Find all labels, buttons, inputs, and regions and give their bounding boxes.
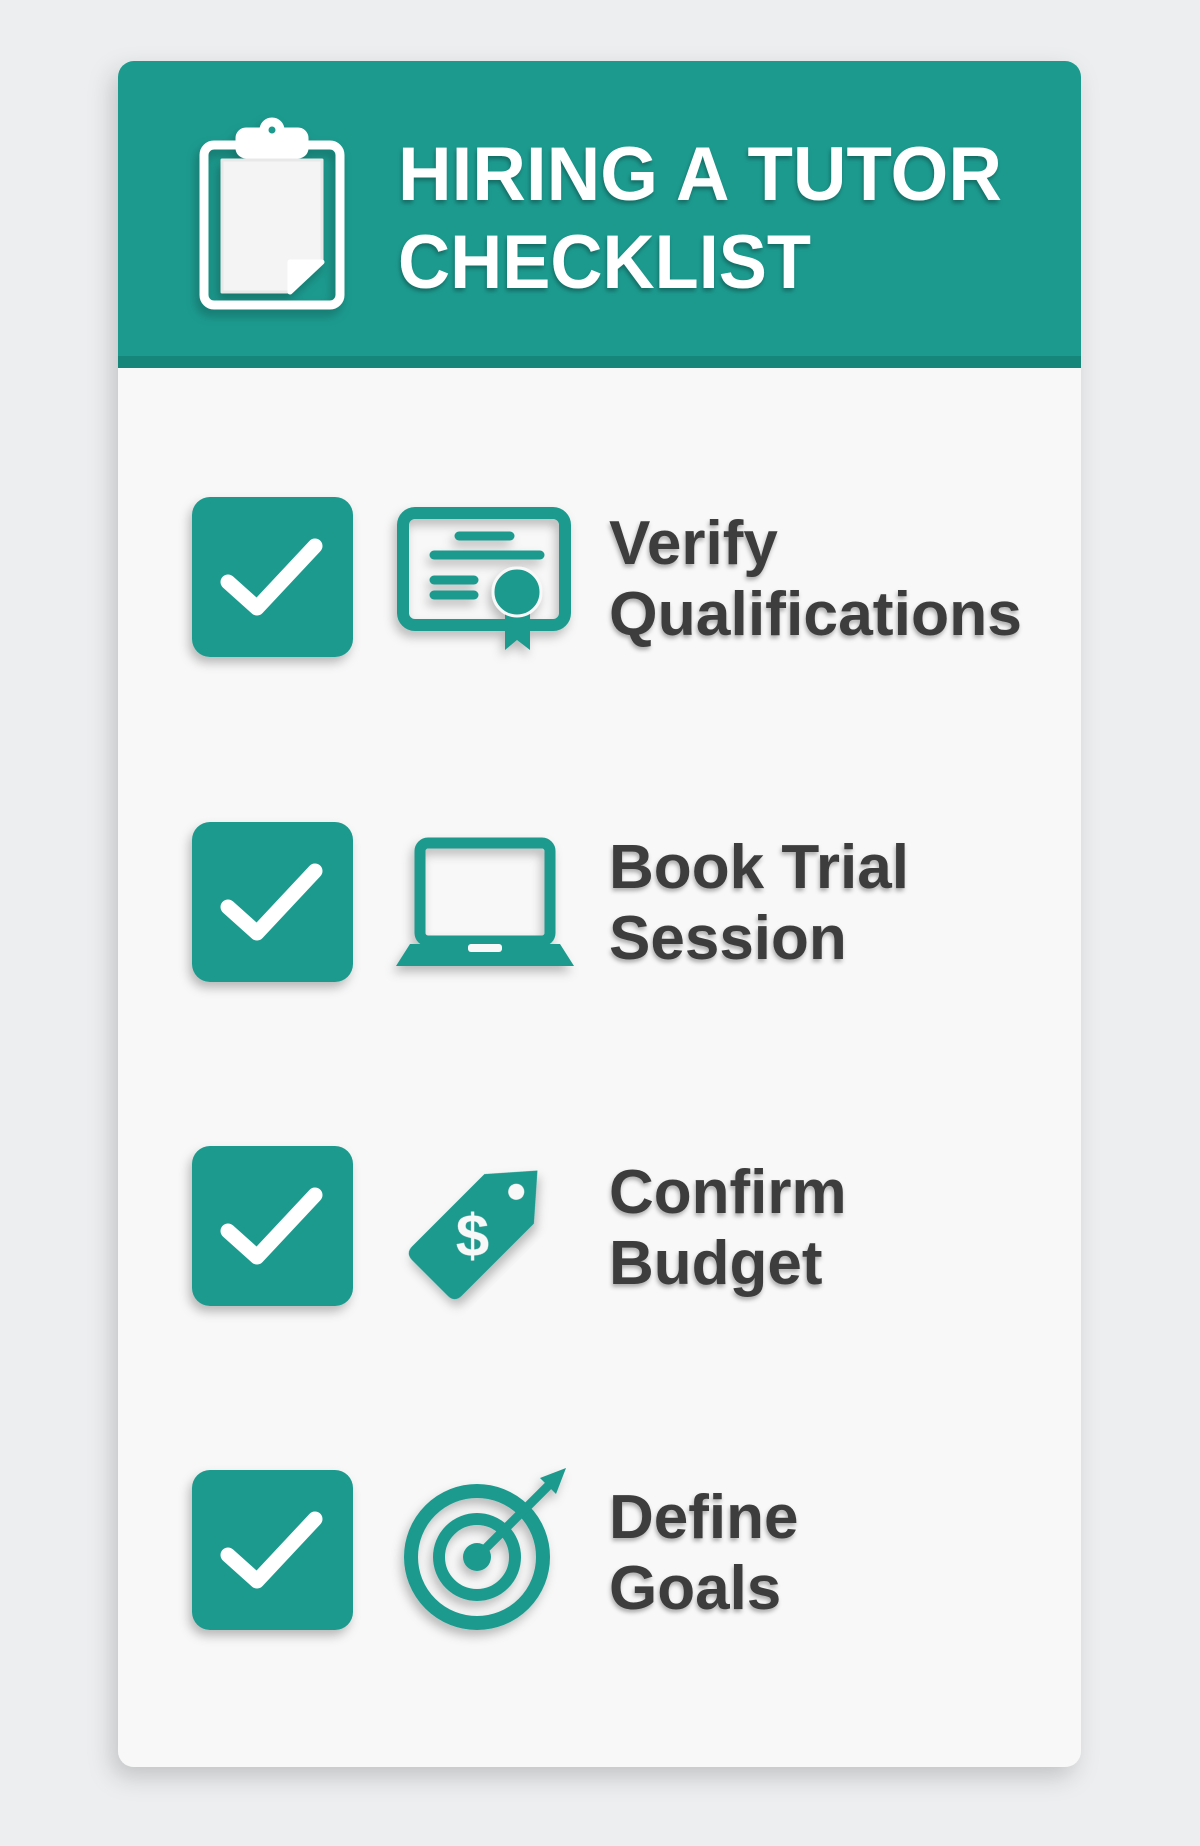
checklist item 3 bbox=[192, 1145, 847, 1306]
label 3: Confirm bbox=[609, 1158, 847, 1227]
title bbox=[398, 132, 1002, 305]
label 1 bbox=[609, 509, 1022, 649]
checkbox 2 bbox=[192, 822, 353, 982]
icon: price tag: $ bbox=[456, 1202, 489, 1269]
checklist item 1 bbox=[192, 497, 1022, 657]
label 1: Verify bbox=[609, 509, 778, 578]
label 3: Budget bbox=[609, 1229, 823, 1298]
label 1: Qualifications bbox=[609, 580, 1022, 649]
title: CHECKLIST bbox=[398, 220, 811, 305]
checkbox 1 bbox=[192, 497, 353, 657]
title: HIRING A TUTOR bbox=[398, 132, 1002, 217]
panel: checklist card bbox=[118, 61, 1081, 1767]
label 4: Define bbox=[609, 1483, 798, 1552]
label 4: Goals bbox=[609, 1554, 781, 1623]
label 2 bbox=[609, 833, 909, 973]
checklist item 2 bbox=[192, 822, 909, 982]
label 2: Session bbox=[609, 904, 847, 973]
checkbox 3 bbox=[192, 1146, 353, 1306]
label 2: Book Trial bbox=[609, 833, 909, 902]
checkbox 4 bbox=[192, 1470, 353, 1630]
header bar bbox=[118, 61, 1081, 368]
checklist item 4 bbox=[192, 1468, 798, 1630]
icon: clipboard bbox=[204, 122, 340, 305]
icon: price tag bbox=[405, 1145, 563, 1303]
label 4 bbox=[609, 1483, 798, 1623]
label 3 bbox=[609, 1158, 847, 1298]
icon: laptop bbox=[396, 843, 574, 966]
icon: certificate bbox=[403, 513, 565, 650]
icon: target bbox=[411, 1468, 566, 1623]
